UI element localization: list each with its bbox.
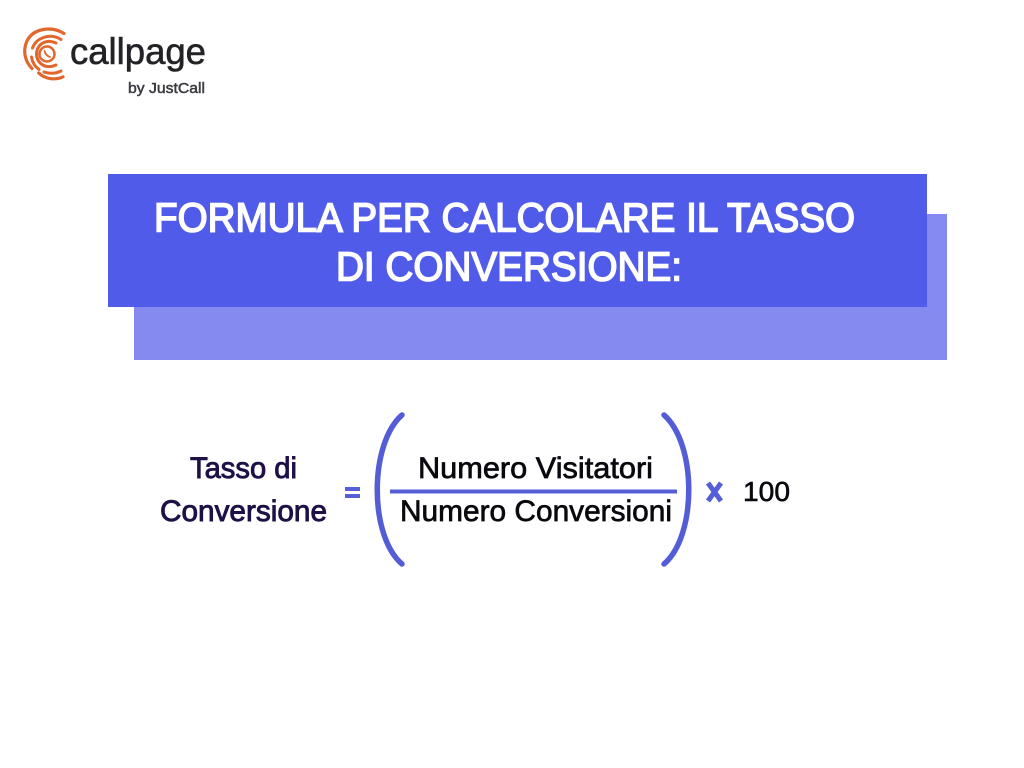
multiply sign [708,483,721,501]
banner shadow block [134,214,947,360]
fraction [390,452,677,528]
label: Tasso di Conversione: Conversione [160,495,327,528]
left parenthesis [377,415,402,564]
equals sign [345,487,360,498]
right parenthesis [664,415,689,564]
label: Tasso di Conversione: Tasso di [190,452,297,485]
title: DI CONVERSIONE: [336,244,682,290]
label: Tasso di Conversione [160,452,327,528]
title [154,194,855,290]
denominator: Numero Conversioni [400,495,672,528]
numerator: Numero Visitatori [418,452,653,485]
icon: orange concentric call rings [25,29,64,79]
multiplier 100: 100 [743,476,790,507]
wordmark: callpage: callpage [70,31,206,72]
title: FORMULA PER CALCOLARE IL TASSO [154,194,855,240]
wordmark: by JustCall: by JustCall [128,80,205,97]
panel: title banner [108,174,947,360]
formula [160,415,790,564]
logo: callpage by JustCall [25,29,206,97]
banner front block [108,174,927,307]
fraction bar [390,490,677,494]
